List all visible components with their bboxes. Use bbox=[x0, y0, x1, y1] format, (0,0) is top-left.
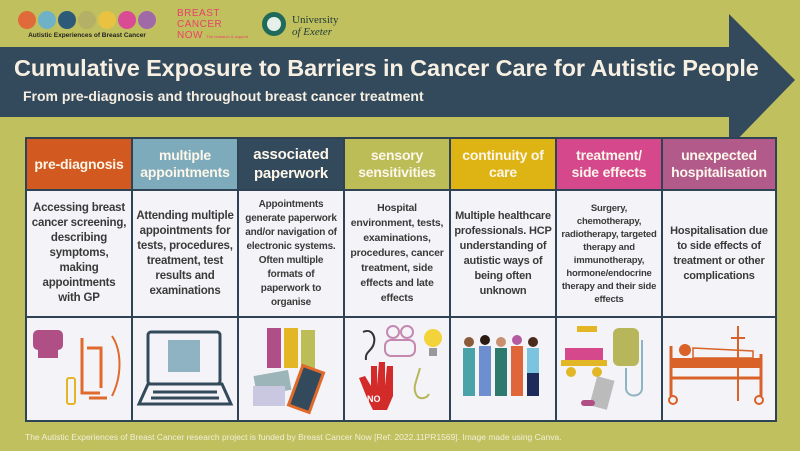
icon: treatment bbox=[555, 316, 663, 422]
header: treatment side effects bbox=[555, 137, 663, 191]
logo: university of exeter bbox=[262, 12, 339, 38]
header: continuity of care: care bbox=[489, 164, 517, 180]
logo: university of exeter: of Exeter bbox=[292, 26, 333, 38]
header: treatment side effects: side effects bbox=[572, 164, 646, 180]
logo: breast cancer now: CANCER bbox=[177, 19, 222, 30]
logo: breast cancer now bbox=[177, 8, 248, 51]
logo: breast cancer now: BREAST bbox=[177, 8, 220, 19]
logo: autistic experiences bbox=[18, 11, 156, 38]
icon: sensory: NO bbox=[367, 394, 380, 404]
text: pre-diagnosis: Accessing breast cancer screening, describing symptoms, making appointments with GP bbox=[32, 202, 126, 304]
logo: university of exeter: University bbox=[292, 14, 339, 26]
icon: sensory bbox=[343, 316, 451, 422]
logo: breast cancer now: NOW The research & support charity bbox=[177, 30, 248, 51]
header: continuity of care bbox=[449, 137, 557, 191]
text: sensory: Hospital environment, tests, examinations, procedures, cancer treatment, side effects and late effects bbox=[350, 202, 444, 304]
icon: phone and mammogram bbox=[25, 316, 133, 422]
text: sensory bbox=[343, 189, 451, 318]
icon: folders and documents bbox=[237, 316, 345, 422]
text: pre-diagnosis bbox=[25, 189, 133, 318]
title: Cumulative Exposure to Barriers in Cancer Care for Autistic People bbox=[14, 55, 759, 81]
text: hospitalisation bbox=[661, 189, 777, 318]
header: multiple appointments: appointments bbox=[140, 164, 230, 180]
subtitle: From pre-diagnosis and throughout breast cancer treatment bbox=[23, 88, 424, 104]
header: continuity of care: continuity of bbox=[462, 147, 544, 163]
header: unexpected hospitalisation: hospitalisation bbox=[671, 164, 767, 180]
footer credit: The Autistic Experiences of Breast Cancer research project is funded by Breast Cancer Now [Ref: 2022.11PR1569]. Image made using Canva. bbox=[25, 432, 562, 442]
text: multiple appointments: Attending multiple appointments for tests, procedures, treatment, test results and examinations bbox=[136, 210, 234, 296]
header: associated paperwork: associated bbox=[253, 146, 329, 163]
header: multiple appointments bbox=[131, 137, 239, 191]
header: treatment side effects: treatment/ bbox=[576, 147, 642, 163]
header: multiple appointments: multiple bbox=[159, 147, 211, 163]
header: unexpected hospitalisation: unexpected bbox=[681, 147, 757, 163]
header: unexpected hospitalisation bbox=[661, 137, 777, 191]
text: continuity bbox=[449, 189, 557, 318]
text: treatment bbox=[555, 189, 663, 318]
header: sensory sensitivities: sensitivities bbox=[358, 164, 436, 180]
icon: laptop calendar bbox=[131, 316, 239, 422]
header: pre-diagnosis: pre-diagnosis bbox=[34, 156, 124, 172]
text: multiple appointments bbox=[131, 189, 239, 318]
header: pre-diagnosis bbox=[25, 137, 133, 191]
header: sensory sensitivities: sensory bbox=[371, 147, 423, 163]
header: associated paperwork: paperwork bbox=[254, 165, 328, 182]
icon: healthcare professionals bbox=[449, 316, 557, 422]
header: sensory sensitivities bbox=[343, 137, 451, 191]
arrow banner bbox=[0, 14, 795, 137]
table bbox=[25, 137, 777, 422]
icon: hospital bed bbox=[661, 316, 777, 422]
text: paperwork: Appointments generate paperwork and/or navigation of electronic systems. Often multiple formats of paperwork to organise bbox=[245, 198, 337, 308]
header: associated paperwork bbox=[237, 137, 345, 191]
text: continuity: Multiple healthcare professionals. HCP understanding of autistic ways of being often unknown bbox=[454, 210, 552, 296]
text: treatment: Surgery, chemotherapy, radiotherapy, targeted therapy and immunotherapy, hormone/endocrine therapy and their side effects bbox=[561, 202, 657, 304]
text: hospitalisation: Hospitalisation due to side effects of treatment or other complications bbox=[670, 224, 768, 282]
